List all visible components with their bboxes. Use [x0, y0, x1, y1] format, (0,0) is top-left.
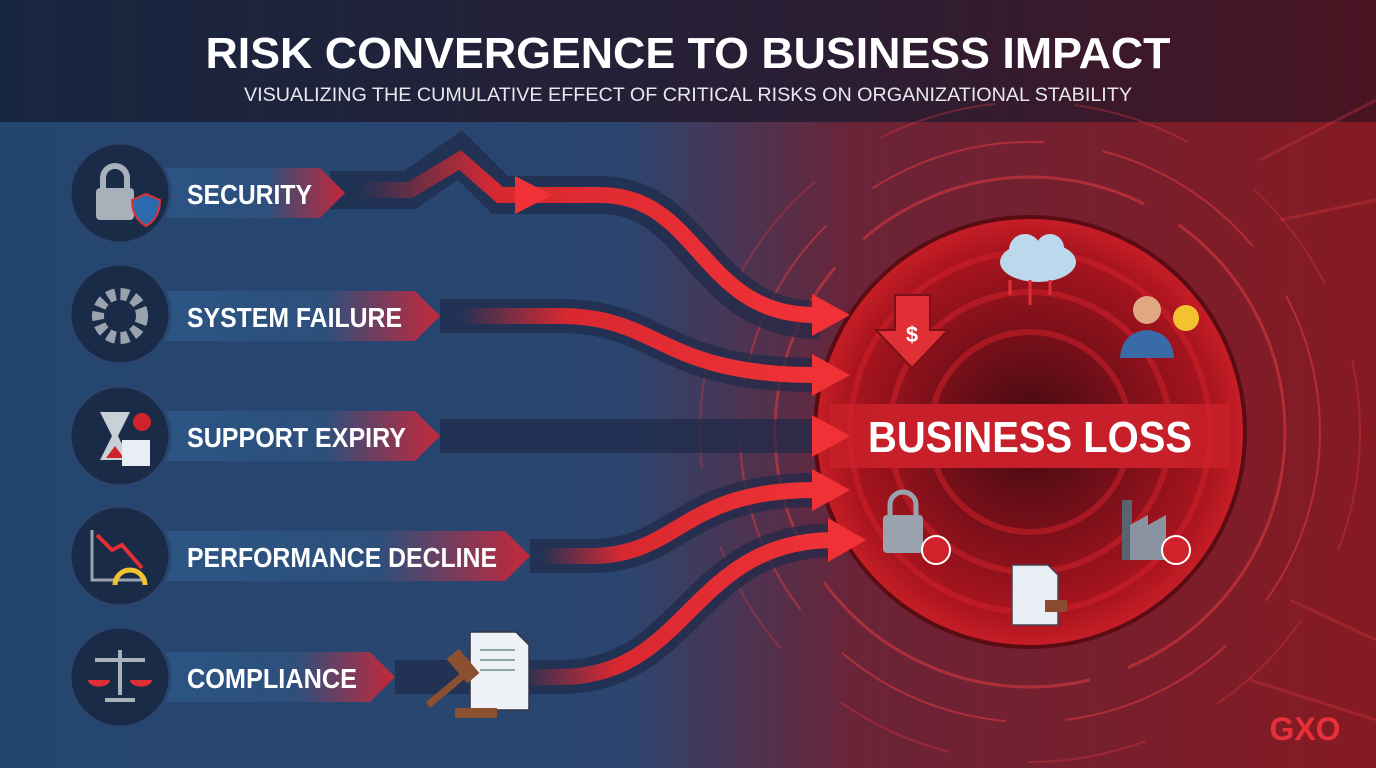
row: support expiry: [70, 386, 440, 486]
icon: locked skull: [883, 492, 950, 564]
vortex: business loss: [815, 217, 1245, 647]
icon: gavel and document: [428, 632, 529, 718]
row: compliance: COMPLIANCE: [187, 663, 357, 694]
icon: dollar down arrow: $: [906, 322, 918, 347]
subtitle: VISUALIZING THE CUMULATIVE EFFECT OF CRITICAL RISKS ON ORGANIZATIONAL STABILITY: [244, 84, 1132, 106]
row: security: [70, 143, 345, 243]
row: support expiry: SUPPORT EXPIRY: [187, 422, 406, 453]
vortex: business loss: BUSINESS LOSS: [868, 413, 1192, 462]
icon: factory: [1122, 500, 1190, 564]
banner: [830, 404, 1230, 468]
convergence arrows: [330, 155, 835, 677]
logo: GXO: GXO: [1269, 711, 1341, 747]
row: compliance: [70, 627, 395, 727]
background circuit rings: [700, 100, 1376, 762]
icon: contract: [1012, 565, 1067, 625]
row: security: SECURITY: [187, 179, 312, 210]
arrowheads: [515, 176, 866, 562]
row: performance decline: PERFORMANCE DECLINE: [187, 542, 497, 573]
icon: dollar down arrow: [876, 295, 948, 368]
header band: [0, 0, 1376, 122]
row: system failure: SYSTEM FAILURE: [187, 302, 402, 333]
row: performance decline: [70, 506, 530, 606]
icon: sad person: [1120, 296, 1199, 358]
row: system failure: [70, 264, 440, 364]
title: RISK CONVERGENCE TO BUSINESS IMPACT: [206, 29, 1171, 78]
icon: broken cloud: [1000, 234, 1076, 305]
